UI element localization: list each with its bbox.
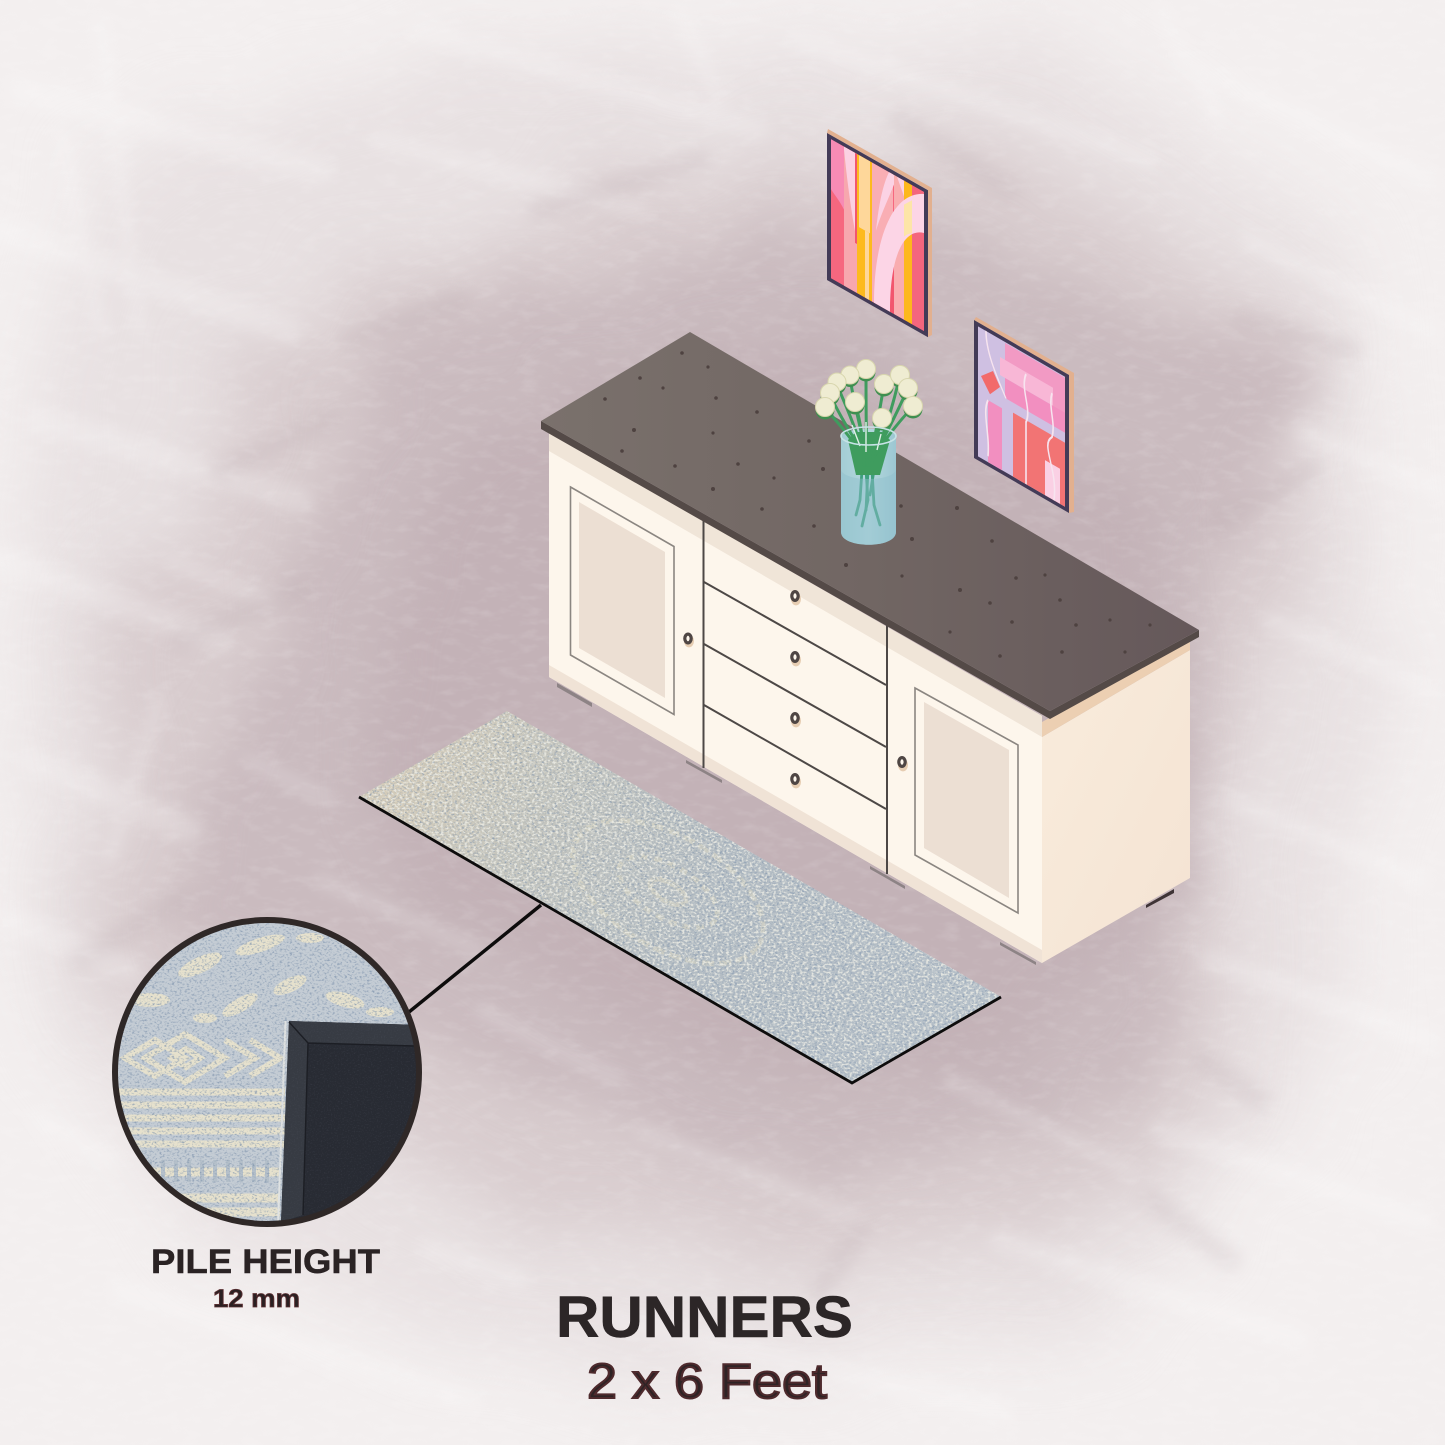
handles bbox=[685, 592, 905, 783]
cabinet front bbox=[549, 433, 1042, 963]
callout ring bbox=[115, 920, 419, 1224]
right door panel bbox=[915, 688, 1018, 913]
callout leader line bbox=[409, 905, 541, 1012]
label: pile height: PILE HEIGHT bbox=[151, 1243, 380, 1281]
vase rim bbox=[841, 427, 896, 445]
title: runners: RUNNERS bbox=[556, 1285, 853, 1350]
countertop speckles bbox=[603, 351, 1152, 658]
folded corner back of rug bbox=[278, 1020, 425, 1230]
rug medallion pattern bbox=[570, 818, 766, 966]
wall art: abstract stripes (left frame) bbox=[827, 129, 932, 337]
icon: vase with white flowers bbox=[816, 360, 922, 545]
countertop edge bbox=[541, 421, 1199, 719]
drawer and door lines bbox=[704, 519, 887, 874]
cabinet feet bbox=[557, 683, 1174, 965]
flower blooms bbox=[816, 360, 922, 430]
subtitle: size: 2 x 6 Feet bbox=[587, 1355, 827, 1409]
runner rug bbox=[350, 700, 1010, 1090]
flower stems bbox=[825, 370, 913, 465]
handle shadows bbox=[684, 593, 908, 788]
sideboard cabinet bbox=[541, 332, 1199, 965]
rug dark edge bbox=[359, 797, 1001, 1083]
vase back bbox=[841, 429, 896, 545]
label: pile height value: 12 mm bbox=[213, 1285, 300, 1313]
strip under countertop on side bbox=[1042, 640, 1190, 737]
wall art: abstract blocks (right frame) bbox=[974, 317, 1074, 513]
cabinet right side bbox=[1042, 650, 1190, 963]
stems seen through water bbox=[856, 470, 880, 526]
stem highlights bbox=[852, 422, 881, 452]
green stem mass at vase neck bbox=[848, 432, 890, 475]
vase water bbox=[841, 470, 896, 545]
cabinet base band bbox=[549, 665, 1042, 963]
countertop bbox=[541, 332, 1199, 711]
shade under countertop bbox=[549, 432, 1042, 737]
left door panel bbox=[570, 487, 674, 714]
callout: zoomed rug corner bbox=[110, 915, 425, 1230]
rug face pattern bbox=[118, 923, 408, 1221]
